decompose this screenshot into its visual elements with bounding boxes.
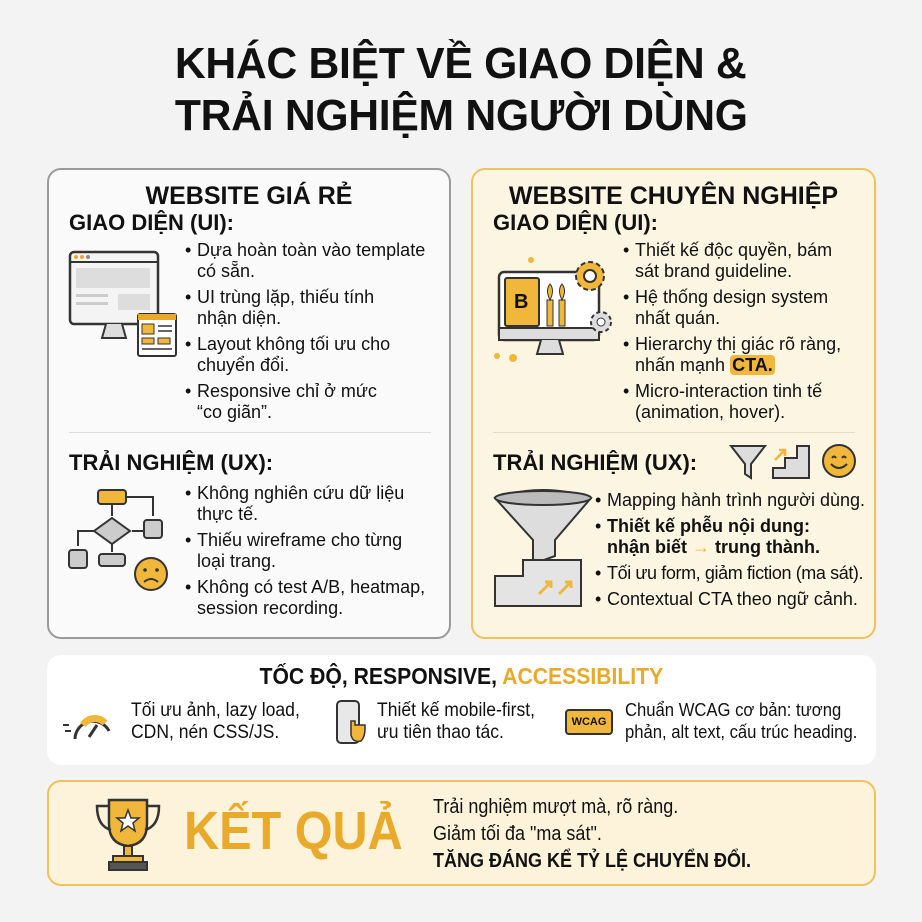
UI bullet list: nhất quán. [635,308,720,328]
UI bullet list: Hierarchy thị giác rõ ràng, [635,334,841,354]
icon: big funnel with stairs [493,489,593,607]
UX bullet list: session recording. [197,598,343,618]
icon: monitor with brand book and gears [494,257,612,362]
panel: tốc độ responsive accessibility [47,655,876,765]
icon: flowchart with sad face [68,489,168,591]
UI bullet list: Dựa hoàn toàn vào template [197,240,425,260]
panel heading: WEBSITE CHUYÊN NGHIỆP [509,182,838,210]
heading: kết quả: KẾT QUẢ [184,801,403,861]
UI bullet list: UI trùng lặp, thiếu tính [197,287,374,307]
icon: WCAG badge: WCAG [572,716,606,728]
result text: Trải nghiệm mượt mà, rõ ràng. [433,796,678,818]
UI bullet list: nhấn mạnh CTA. [635,355,773,375]
UX bullet list: nhận biết → trung thành. [607,537,820,557]
subheading UI: GIAO DIỆN (UI): [493,210,658,235]
item: mobile: Thiết kế mobile-first, [377,699,535,721]
UX bullet list [596,490,865,609]
icon: phone [336,700,366,744]
panel heading: WEBSITE GIÁ RẺ [146,182,352,210]
UX bullet list: loại trang. [197,551,276,571]
UI bullet list [186,240,425,422]
UI bullet list: (animation, hover). [635,402,785,422]
item: WCAG: Chuẩn WCAG cơ bản: tương [625,699,841,720]
UI bullet list: Hệ thống design system [635,287,828,307]
UX bullet list: Thiết kế phễu nội dung: [607,516,810,536]
icon: monitor template [68,250,177,357]
item: speed [63,699,300,743]
subheading UI: GIAO DIỆN (UI): [69,210,234,235]
subheading UX: TRẢI NGHIỆM (UX): [69,450,273,475]
icon: WCAG badge [565,709,613,735]
icon: speedometer [63,715,110,739]
item: mobile: ưu tiên thao tác. [377,721,504,743]
icon: trophy [96,798,160,871]
result text: TĂNG ĐÁNG KỂ TỶ LỆ CHUYỂN ĐỔI. [433,850,751,872]
icons: funnel, stairs, smiley [729,444,856,480]
title: KHÁC BIỆT VỀ GIAO DIỆN & [175,39,747,88]
item: WCAG: phản, alt text, cấu trúc heading. [625,721,857,742]
item: WCAG [565,699,857,742]
title: TRẢI NGHIỆM NGƯỜI DÙNG [175,91,747,140]
result text: Giảm tối đa "ma sát". [433,823,602,845]
UX bullet list: Không nghiên cứu dữ liệu [197,483,404,503]
UI bullet list: sát brand guideline. [635,261,792,281]
UX bullet list: Mapping hành trình người dùng. [607,490,865,510]
UI bullet list [624,240,841,422]
heading: TỐC ĐỘ, RESPONSIVE, ACCESSIBILITY [260,663,663,689]
UX bullet list: Không có test A/B, heatmap, [197,577,425,597]
panel: kết quả [47,780,876,886]
item: mobile [336,699,535,744]
subheading UX with icons [493,444,856,480]
UI bullet list: “co giãn”. [197,402,272,422]
item: speed: Tối ưu ảnh, lazy load, [131,699,300,721]
UI bullet list: chuyển đổi. [197,355,289,375]
UI bullet list: Responsive chỉ ở mức [197,381,377,401]
panel: website chuyên nghiệp [471,168,876,639]
UX bullet list: thực tế. [197,504,258,524]
item: speed: CDN, nén CSS/JS. [131,721,279,743]
UI bullet list: Thiết kế độc quyền, bám [635,240,832,260]
UX bullet list: Thiếu wireframe cho từng [197,530,402,550]
UI bullet list: nhận diện. [197,308,281,328]
icon: monitor with brand book and gears: B [514,291,528,313]
UI bullet list: Micro-interaction tinh tế [635,381,822,401]
subheading UX with icons: TRẢI NGHIỆM (UX): [493,450,697,475]
UI bullet list: Layout không tối ưu cho [197,334,390,354]
panel: website giá rẻ [47,168,451,639]
UX bullet list: Tối ưu form, giảm fiction (ma sát). [607,563,863,583]
UI bullet list: có sẵn. [197,261,255,281]
title [175,39,747,140]
result text [433,796,751,872]
UX bullet list: Contextual CTA theo ngữ cảnh. [607,589,858,609]
UX bullet list [186,483,425,618]
